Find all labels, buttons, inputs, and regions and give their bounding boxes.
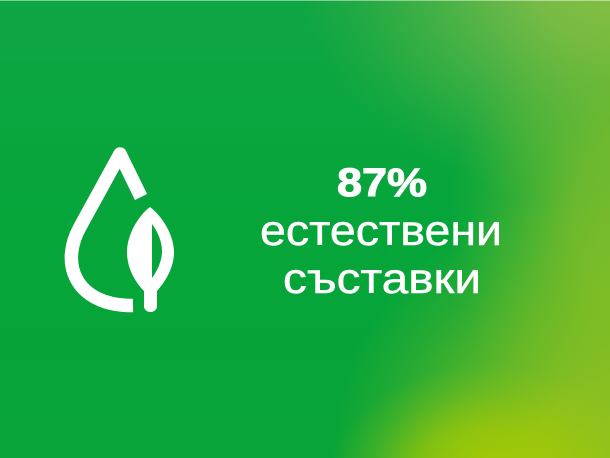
label line 2: съставки bbox=[283, 255, 481, 303]
icon: leaf bbox=[127, 207, 174, 312]
text block: statistic bbox=[260, 161, 502, 303]
icon: water drop with leaf bbox=[71, 154, 174, 312]
icon: water drop outline bbox=[71, 154, 141, 306]
percentage: 87% bbox=[337, 161, 427, 205]
label line 1: естествени bbox=[260, 207, 502, 255]
